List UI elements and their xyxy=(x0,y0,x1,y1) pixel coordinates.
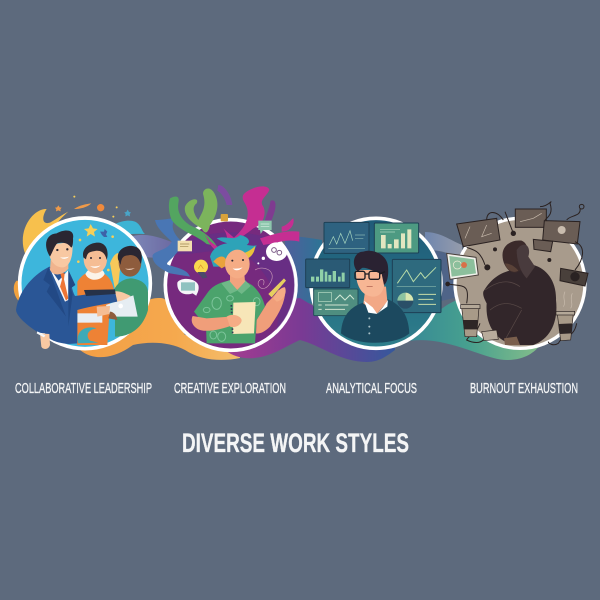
flowing wave band xyxy=(80,232,540,362)
circle with teal background xyxy=(311,218,441,348)
icon: laptop and hands xyxy=(77,295,138,345)
icon: confetti xyxy=(55,196,131,218)
figure: colleague in orange xyxy=(77,243,114,345)
figure: analyst with glasses xyxy=(341,251,409,343)
panel: creative exploration xyxy=(153,185,299,350)
icon: orange splash xyxy=(14,281,37,310)
title: DIVERSE WORK STYLES xyxy=(182,428,409,458)
icon: green swirls xyxy=(169,188,217,246)
label: collaborative leadership: COLLABORATIVE LEADERSHIP xyxy=(15,380,152,397)
icon: coffee cup right xyxy=(556,311,575,341)
icon: speech bubble sketch xyxy=(177,279,199,296)
icon: magenta swirls xyxy=(205,185,299,256)
icon: coffee cup left xyxy=(461,305,480,337)
figure: colleague in green xyxy=(114,246,148,337)
icon: small green monitor xyxy=(447,253,478,279)
dashboard panel: dark bar chart xyxy=(306,259,350,288)
figure: exhausted person xyxy=(483,240,556,345)
icon: lock doodle xyxy=(221,214,228,221)
dashboard panel: line chart with pie xyxy=(392,259,441,313)
panel: collaborative leadership xyxy=(14,196,150,349)
icon: broken monitors xyxy=(457,209,588,286)
figure: leader in blue suit xyxy=(16,230,131,349)
dashboard panel: green bar chart xyxy=(374,223,419,253)
circle with purple background xyxy=(165,220,297,350)
panel: analytical focus xyxy=(306,218,441,348)
label: creative exploration: CREATIVE EXPLORATION xyxy=(174,380,286,397)
icon: note card xyxy=(178,241,192,251)
icon: thought bubble xyxy=(257,242,287,264)
icon: fallen cup xyxy=(482,330,498,341)
icon: light bulb xyxy=(194,260,208,279)
icon: yellow paint splash xyxy=(23,209,68,270)
circle with sky background xyxy=(20,218,150,349)
icon: rainbow hair xyxy=(210,235,257,268)
icon: pencil xyxy=(268,278,286,302)
icon: notepad xyxy=(227,302,256,334)
icon: teal splash xyxy=(105,221,145,234)
icon: doodle loops xyxy=(255,268,272,289)
icon: teal and blue swirl xyxy=(153,218,190,277)
dashboard panel: lower data table xyxy=(314,289,358,316)
label: analytical focus: ANALYTICAL FOCUS xyxy=(326,380,417,397)
icon: green message bubble xyxy=(258,221,272,234)
panel: burnout exhaustion xyxy=(445,202,588,348)
dashboard panel: line chart xyxy=(324,222,369,253)
circle with taupe background xyxy=(455,218,585,348)
figure: creative man xyxy=(192,250,285,343)
icon: tangled cables xyxy=(448,202,583,345)
